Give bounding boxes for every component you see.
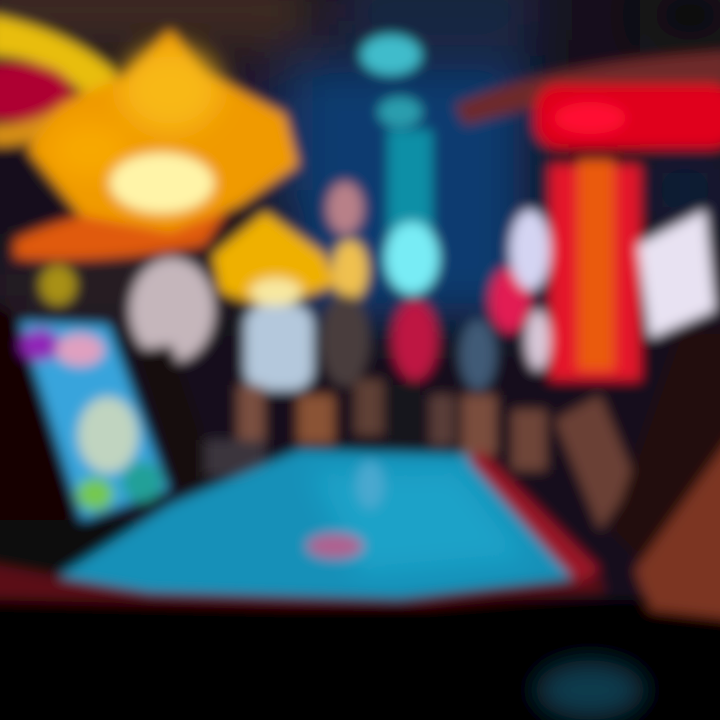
table edge [0, 562, 605, 608]
red gate [455, 52, 720, 380]
right foreground chairs [610, 330, 720, 620]
lamp centre [213, 212, 368, 308]
red awning top left [0, 15, 118, 145]
slot machine screen [0, 265, 168, 545]
figures [130, 182, 715, 390]
bottom dark foreground [0, 606, 720, 720]
hanging lamp left [15, 30, 298, 260]
cyan lights [361, 35, 439, 294]
table [0, 450, 600, 598]
row of chairs [135, 345, 635, 530]
